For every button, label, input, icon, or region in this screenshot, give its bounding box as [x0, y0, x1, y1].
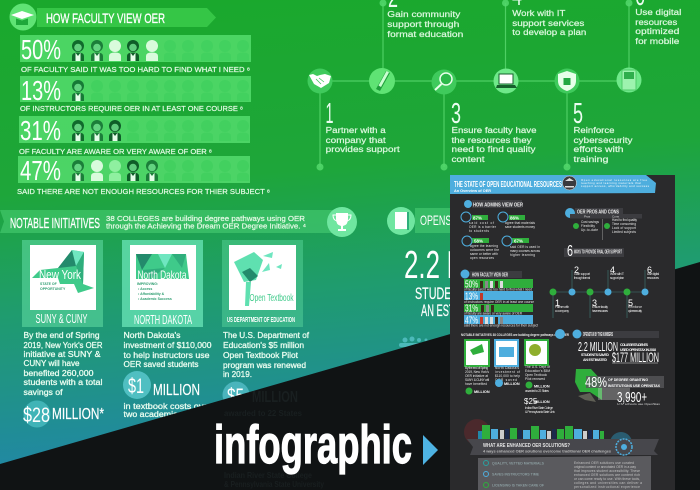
faded text on black band [224, 389, 324, 489]
thumbnail: how faculty view OER: 31% [465, 304, 478, 314]
thumbnail: notable initiatives: The U.S. Dept of [525, 365, 550, 369]
thumbnail: OpenStax stats: 3,990+ [617, 389, 647, 406]
card: North Dakota: • Academic Success [138, 297, 172, 301]
thumbnail: OER pros and cons: Pros [584, 214, 591, 218]
thumbnail: how faculty view OER: of faculty are aware or very aware of OER [464, 312, 523, 316]
icon: pencil [369, 68, 395, 94]
panel: OpenStax: AN ESTIMATED [421, 301, 489, 320]
text: SUNY and CUNY: savings of [24, 388, 63, 397]
thumbnail: how faculty view OER: of instructors require OER in at least one course [464, 300, 534, 304]
banner: notable initiatives: NOTABLE INITIATIVES [10, 215, 100, 232]
step 5: cybersecurity [574, 135, 633, 145]
thumbnail: notable initiatives: OER saved [495, 378, 517, 382]
stat: 47%: SAID THERE ARE NOT ENOUGH RESOURCES FOR THIER SUBJECT ⁸ [17, 187, 270, 196]
thumbnail: how administrators view OER: agree the learning [470, 244, 498, 248]
card: North Dakota: NORTH DAKOTA [134, 312, 192, 327]
thumbnail: enhanced solutions panel: LICENSING IS TAKEN CARE OF [492, 484, 544, 488]
thumbnail: how administrators view OER: outcomes were the [470, 248, 499, 252]
thumbnail: six ways to provide OER: support plan [610, 276, 624, 280]
thumbnail: notable initiatives: Pilot renewed [525, 377, 545, 381]
text: North Dakota: $1 [128, 375, 144, 398]
text: US Department of Education: in 2019. [223, 370, 252, 379]
thumbnail: OpenStax stats: INSTITUTIONS USE OPENSTAX [608, 384, 661, 388]
thumbnail: how administrators view OER: HOW ADMINS VIEW OER [473, 202, 523, 208]
thumbnail: six ways to provide OER: WAYS TO PROVIDE FINAL OER SUPPORT [574, 250, 622, 256]
thumbnail: OER pros and cons: Flexibility [581, 224, 595, 228]
thumbnail: OER pros and cons: OER PROS AND CONS [577, 210, 620, 216]
thumbnail: OpenStax stats: U.S. schools use OpenStax [617, 402, 661, 406]
step 6: Use digital [635, 7, 681, 17]
thumbnail: six ways to provide OER: Gain support [574, 272, 590, 276]
thumbnail: six ways to provide OER: 5 [628, 298, 633, 308]
banner: notable initiatives [0, 207, 357, 237]
step 4: Work with IT [512, 8, 565, 18]
thumbnail: how faculty view OER: 50% [465, 280, 478, 290]
thumbnail: how administrators view OER: agree that materials [505, 221, 535, 225]
step 2: Gain community [387, 9, 461, 19]
stat: 31%: OF FACULTY ARE AWARE OR VERY AWARE OF OER ⁸ [19, 147, 212, 156]
faded text on black band: Indian River State College [224, 471, 312, 480]
text: North Dakota: North Dakota's [124, 331, 180, 340]
thumbnail: how administrators view OER: 87% [473, 216, 482, 220]
step 3: 3 [451, 98, 461, 130]
thumbnail: how administrators view OER: same or better with [470, 252, 498, 256]
thumbnail: how administrators view OER [461, 200, 540, 260]
step 3: the resources they [452, 135, 532, 145]
thumbnail: six ways to provide OER [550, 243, 659, 318]
thumbnail: OpenStax stats: 48% [585, 374, 607, 391]
thumbnail: OpenStax stats: STUDENTS SAVED [581, 353, 609, 357]
text: North Dakota: MILLION [153, 382, 200, 399]
thumbnail: OER pros and cons: Up-to-date [581, 228, 598, 232]
text: North Dakota: in textbook costs over [124, 402, 212, 411]
card: SUNY and CUNY: STATE OF [40, 282, 58, 286]
thumbnail: six ways to provide OER: Reinforce [628, 305, 642, 309]
thumbnail: how faculty view OER [460, 270, 538, 328]
text: SUNY and CUNY: 2019, New York's OER [24, 341, 103, 350]
step 3: Ensure faculty have [452, 125, 537, 135]
thumbnail: notable initiatives: $110,000 to help [495, 374, 520, 378]
thumbnail: OpenStax stats: OPENSTAX BY THE NUMBERS [583, 332, 613, 338]
thumbnail: six ways to provide OER: 3 [592, 298, 597, 308]
step 4: to develop a plan [512, 27, 587, 37]
thumbnail: notable initiatives: Indian River State College [525, 406, 553, 410]
thumbnail: how administrators view OER: open resources [470, 256, 494, 260]
step 5 [573, 98, 633, 164]
card: SUNY and CUNY: New York [39, 267, 81, 282]
card: North Dakota: IMPROVING: [137, 282, 158, 286]
text: SUNY and CUNY: By the end of Spring [24, 331, 100, 340]
stat: 50% [20, 34, 251, 74]
step 1: 1 [326, 98, 334, 130]
stat: 13% [20, 75, 251, 113]
thumbnail: six ways to provide OER: cybersecurity [628, 309, 642, 313]
black diagonal band [0, 262, 700, 490]
thumbnail: notable initiatives: MILLION [534, 400, 550, 404]
thumbnail: six ways to provide OER: 1 [555, 298, 560, 308]
card: SUNY and CUNY: OPPORTUNITY [40, 287, 66, 291]
thumbnail header: An Overview of OER [454, 189, 491, 193]
thumbnail: notable initiatives: investment of [495, 370, 520, 374]
stat: 13%: OF INSTRUCTORS REQUIRE OER IN AT LEAST ONE COURSE ⁸ [20, 104, 243, 113]
thumbnail header [450, 175, 656, 194]
icon: people dots [399, 336, 429, 347]
thumbnail: how administrators view OER: 67% [514, 238, 523, 244]
thumbnail: how faculty view OER: of faculty said it was too hard to find what I need [464, 288, 532, 292]
thumbnail: how administrators view OER: many courses across [510, 249, 540, 253]
thumbnail: books and solutions banner [464, 419, 659, 455]
thumbnail: six ways to provide OER: resources [647, 276, 659, 280]
panel: OpenStax: STUDENTS [415, 284, 473, 303]
thumbnail: notable initiatives: MILLION [504, 382, 520, 386]
panel: OpenStax: MILLION [447, 244, 532, 287]
thumbnail: notable initiatives: SUNY & CUNY will [465, 378, 489, 382]
step 3 [451, 98, 537, 164]
thumbnail: notable initiatives: $25 [524, 397, 538, 406]
text: US Department of Education: program was renewed [223, 361, 306, 370]
card: North Dakota [122, 240, 203, 327]
icon: North Dakota map [136, 254, 189, 279]
thumbnail: six ways to provide OER: Partner with [555, 305, 569, 309]
thumbnail: OER pros and cons: Time consuming [612, 222, 636, 226]
stat: 31% [19, 115, 250, 156]
stat: 13%: 13% [21, 75, 61, 106]
thumbnail: how administrators view OER: higher learning [510, 253, 535, 257]
stat: 50%: 50% [21, 34, 61, 65]
icon: handshake [308, 68, 332, 94]
stat: 50%: OF FACULTY SAID IT WAS TOO HARD TO FIND WHAT I NEED ⁸ [21, 65, 250, 74]
thumbnail: OpenStax stats [572, 330, 664, 406]
panel: OpenStax: OPENSTAX [420, 212, 468, 228]
thumbnail: how administrators view OER: said OER is used in [510, 245, 540, 249]
thumbnail: how administrators view OER: OER is a barrier [469, 225, 497, 229]
text: SUNY and CUNY: initiative at SUNY & [24, 350, 101, 359]
text: SUNY and CUNY: students with a total [24, 378, 103, 387]
thumbnail: enhanced solutions panel: Enhanced OER solutions use curated [574, 461, 634, 465]
thumbnail: enhanced solutions panel: QUALITY, VETTED MATERIALS [492, 462, 545, 466]
thumbnail: enhanced solutions panel: colleges and universities can deliver a [574, 481, 642, 485]
thumbnail: how faculty view OER: 47% [465, 316, 478, 326]
faded text on black band: MILLION [252, 389, 298, 406]
thumbnail header: teaching and learning materials that [581, 181, 641, 185]
text: US Department of Education: MILLION [252, 389, 298, 406]
text: US Department of Education: The U.S. Department of [223, 331, 310, 340]
step 2: support through [387, 19, 460, 29]
thumbnail: how administrators view OER: said cost of [469, 221, 494, 225]
thumbnail: OER pros and cons: Cost savings [581, 220, 599, 224]
icon: book [387, 207, 415, 235]
thumbnail: notable initiatives: MILLION [534, 384, 550, 388]
step 5: training [574, 154, 609, 164]
icon: open textbook tree [234, 252, 282, 306]
card: SUNY and CUNY [22, 240, 103, 327]
panel: OpenStax: 2.2 [404, 244, 440, 287]
step 1: Partner with a [326, 125, 386, 135]
text: North Dakota [123, 331, 212, 419]
thumbnail: OER pros and cons: Cons [612, 214, 620, 218]
step 1: provides support [326, 144, 400, 154]
thumbnail: notable initiatives [461, 329, 569, 414]
thumbnail: notable initiatives: NOTABLE INITIATIVES 38 COLLEGES are building degree pathways using OER [461, 333, 569, 337]
faded text on black band: awarded to 22 States [224, 409, 303, 418]
card: North Dakota: • Affordability & [138, 292, 165, 296]
thumbnail: six ways to provide OER: Use digital [647, 272, 659, 276]
stat: 47%: 47% [20, 155, 61, 186]
thumbnail: six ways to provide OER: Work with IT [610, 272, 624, 276]
icon: trophy [327, 207, 357, 237]
embedded infographic thumbnail [450, 175, 675, 490]
callout: infographic label: infographic [214, 415, 412, 475]
panel: how faculty view OER [10, 4, 270, 196]
icon: New York map [32, 250, 94, 293]
step 6: resources [635, 17, 677, 27]
icon: magnifier [432, 70, 456, 94]
text: US Department of Education: $5 [227, 385, 244, 408]
text: North Dakota: two academic years [124, 410, 202, 419]
thumbnail: notable initiatives: By the end of Spring [465, 366, 488, 370]
thumbnail: OER pros and cons [565, 208, 642, 240]
text: SUNY and CUNY: MILLION* [52, 406, 104, 423]
stat: 31%: 31% [20, 115, 61, 146]
thumbnail: six ways to provide OER: a company [555, 309, 569, 313]
thumbnail header: THE STATE OF OPEN EDUCATIONAL RESOURCES [454, 180, 562, 189]
text: SUNY and CUNY: CUNY will have [24, 359, 80, 368]
thumbnail: enhanced solutions panel [478, 456, 651, 490]
thumbnail: OpenStax stats: COLLEGE STUDENTS [620, 343, 649, 347]
icon: mobile phone [616, 68, 642, 92]
thumbnail: OpenStax stats: 2.2 MILLION [578, 339, 618, 354]
thumbnail: enhanced solutions panel: that improves student accessibility. These [574, 469, 640, 473]
card: US Department of Education [222, 240, 303, 327]
timeline: six steps [308, 0, 681, 170]
text: SUNY and CUNY: benefited 260,000 [24, 369, 94, 378]
arrow [423, 435, 438, 465]
step 5: 5 [573, 98, 583, 130]
thumbnail: books and solutions banner: 4 ways enhanced OER solutions overcome traditional OER challenges [483, 450, 611, 454]
thumbnail: notable initiatives: North Dakota's [495, 366, 519, 370]
text: SUNY and CUNY: $28 [23, 404, 50, 427]
thumbnail: OER pros and cons: Hard to find quality [612, 218, 637, 222]
step 5: efforts with [574, 144, 624, 154]
thumbnail: OER pros and cons: Lack of support [612, 226, 636, 230]
thumbnail: six ways to provide OER: 6 [647, 265, 652, 275]
thumbnail: notable initiatives: Open Textbook [525, 373, 547, 377]
thumbnail: enhanced solutions panel: or can come ready to use. With these tools, [574, 477, 640, 481]
thumbnail header: Open educational resources are free [581, 178, 647, 182]
text: SUNY and CUNY [23, 331, 104, 428]
thumbnail: six ways to provide OER: 6 [567, 243, 573, 260]
step 3: content [452, 154, 485, 164]
heading banner [10, 4, 216, 30]
card: US Department of Education: US DEPARTMENT OF EDUCATION [227, 317, 295, 324]
thumbnail: notable initiatives: MILLION [474, 390, 490, 394]
thumbnail: OER pros and cons: Limited subjects [612, 230, 636, 234]
thumbnail: how administrators view OER: 58% [474, 238, 483, 244]
thumbnail: notable initiatives: have benefited [465, 382, 487, 386]
thumbnail: notable initiatives: awarded to 22 States [525, 389, 549, 393]
card: SUNY and CUNY: SUNY & CUNY [36, 311, 88, 326]
thumbnail: six ways to provide OER: 2 [574, 265, 579, 275]
thumbnail: notable initiatives: & Pennsylvania State Univ [525, 410, 555, 414]
faded text on black band: & Pennsylvania State University [224, 480, 324, 489]
thumbnail: OpenStax stats: AN ESTIMATED [583, 358, 607, 362]
thumbnail: how administrators view OER: to students [469, 229, 489, 233]
text: US Department of Education [222, 331, 310, 408]
thumbnail: six ways to provide OER: have resources [592, 309, 608, 313]
thumbnail: enhanced solutions panel: personalized instructional experience [574, 485, 640, 489]
step 1 [326, 98, 400, 154]
thumbnail header: support access, affordability and success [581, 184, 650, 188]
thumbnail: enhanced solutions panel: enhanced OER solutions are content rich [574, 473, 640, 477]
step 6 [635, 0, 681, 46]
icon: shield [554, 68, 580, 94]
thumbnail: six ways to provide OER: 4 [610, 265, 615, 275]
text: North Dakota: OER saved students [124, 360, 198, 369]
icon: laptop [494, 68, 518, 94]
panel: OpenStax [387, 207, 532, 347]
step 4: support services [512, 18, 584, 28]
thumbnail: OpenStax stats: OF DEGREE GRANTING [608, 378, 648, 382]
step 6: optimized [635, 26, 680, 36]
thumbnail: OpenStax stats: USED OPENSTAX IN 2018 [620, 348, 656, 352]
step 4 [512, 0, 587, 37]
text: North Dakota: to help instructors use [124, 351, 210, 360]
thumbnail: six ways to provide OER: through format [574, 276, 590, 280]
thumbnail: how faculty view OER: HOW FACULTY VIEW OER [472, 272, 508, 278]
card: North Dakota: • Access [138, 287, 152, 291]
step 6: for mobile [635, 36, 680, 46]
thumbnail: how faculty view OER: 13% [465, 292, 478, 302]
step 1: company that [326, 135, 386, 145]
books row [478, 425, 604, 439]
thumbnail: how administrators view OER: save students money [505, 225, 535, 229]
thumbnail: notable initiatives: 2019, New York's [465, 370, 489, 374]
step 2: format education [387, 29, 464, 39]
text: US Department of Education: Open Textbook Pilot [223, 351, 299, 360]
thumbnail: notable initiatives: Education's $5M [525, 369, 550, 373]
thumbnail: six ways to provide OER: Ensure faculty [592, 305, 608, 309]
card: North Dakota: North Dakota [138, 268, 187, 282]
thumbnail: how faculty view OER: said there are not enough resources for their subject [464, 324, 538, 328]
banner: notable initiatives: through the Achieving the Dream OER Degree Initiative. ⁴ [106, 222, 306, 230]
stat: 47% [17, 155, 270, 196]
banner: notable initiatives: 38 COLLEGES are building degree pathways using OER [106, 214, 306, 223]
heading banner: HOW FACULTY VIEW OER [46, 10, 165, 26]
step 2 [387, 0, 464, 39]
thumbnail: books and solutions banner: WHAT ARE ENHANCED OER SOLUTIONS? [483, 443, 570, 449]
thumbnail: enhanced solutions panel: SAVES INSTRUCTORS TIME [492, 472, 540, 476]
thumbnail: enhanced solutions panel: original content or annotated OER in a way [574, 465, 636, 469]
thumbnail: how administrators view OER: 86% [510, 216, 519, 220]
text: US Department of Education: Education's $5 million [223, 341, 304, 350]
text: North Dakota: investment of $110,000 [124, 341, 212, 350]
step 3: need to find quality [452, 144, 536, 154]
card: US Department of Education: Open Textbook [250, 292, 294, 304]
thumbnail: notable initiatives: OER initiative at [465, 374, 488, 378]
step 5: Reinforce [574, 125, 615, 135]
